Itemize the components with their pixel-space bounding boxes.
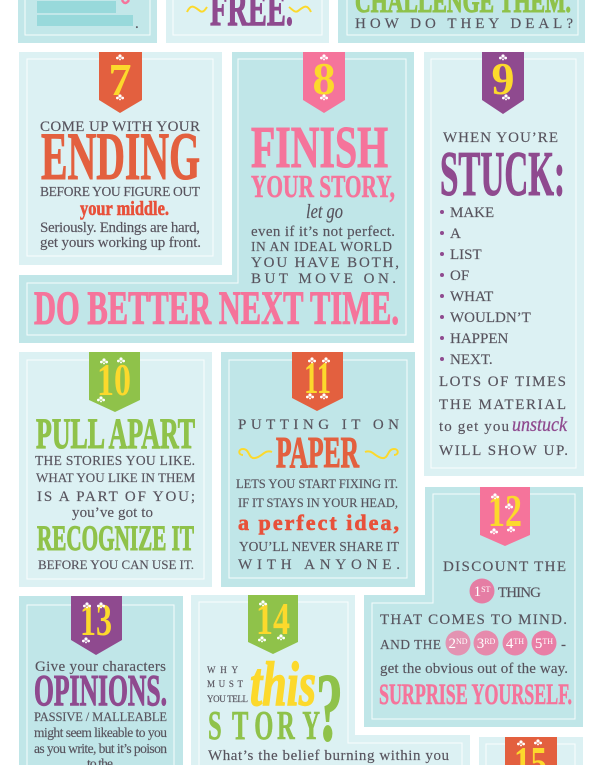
panel: rule 12: 4 bbox=[506, 636, 513, 652]
panel: rule 14: What’s the belief burning within you bbox=[208, 748, 450, 764]
panel: rule 11: 11 bbox=[304, 352, 331, 403]
panel: rule 9: 9 bbox=[492, 53, 514, 104]
panel: rule 9: MAKE bbox=[450, 205, 494, 221]
panel: rule 12: 5 bbox=[535, 636, 542, 652]
panel: rule 14 bbox=[191, 593, 470, 765]
panel: rule 14: STORY bbox=[208, 704, 320, 749]
panel: rule 7: your middle. bbox=[80, 198, 169, 220]
panel: rule 11: a perfect idea, bbox=[238, 510, 399, 535]
panel: top left cropped card: . bbox=[135, 16, 139, 32]
panel: rule 13: as you write, but it’s poison bbox=[34, 741, 167, 756]
panel: rule 11: IF IT STAYS IN YOUR HEAD, bbox=[238, 496, 398, 510]
panel: rule 11: PAPER bbox=[276, 428, 360, 477]
panel: rule 11: YOU’LL NEVER SHARE IT bbox=[239, 539, 400, 554]
panel: rule 9: to get you bbox=[439, 419, 510, 435]
panel: rule 13: Give your characters bbox=[35, 659, 166, 675]
panel: rule 8: even if it’s not perfect. bbox=[251, 224, 395, 240]
panel: rule 14: WHY bbox=[207, 665, 238, 675]
panel: rule 9: WHEN YOU’RE bbox=[443, 130, 558, 146]
panel: rule 12: 2 bbox=[448, 636, 456, 652]
panel: rule 8: YOUR STORY, bbox=[251, 168, 395, 204]
panel: rule 8: DO BETTER NEXT TIME. bbox=[34, 282, 399, 335]
panel: rule 9: LIST bbox=[450, 247, 482, 263]
panel: rule 13: might seem likeable to you bbox=[34, 725, 167, 740]
panel: rule 8 bbox=[19, 52, 414, 343]
panel: rule 12: THAT COMES TO MIND. bbox=[380, 612, 567, 628]
panel: rule 14: this bbox=[250, 651, 316, 719]
panel: rule 12: - bbox=[561, 637, 566, 653]
panel: rule 15 bbox=[479, 737, 583, 765]
panel: rule 14: ? bbox=[316, 654, 343, 762]
panel: rule 13: OPINIONS. bbox=[34, 666, 167, 715]
panel: rule 8: YOU HAVE BOTH, bbox=[251, 255, 399, 271]
panel: rule 11 bbox=[221, 352, 415, 587]
panel: rule 12: RD bbox=[484, 637, 496, 646]
panel: rule 9: unstuck bbox=[512, 414, 568, 436]
panel: rule 11: WITH ANYONE. bbox=[238, 557, 400, 573]
panel: rule 7: BEFORE YOU FIGURE OUT bbox=[40, 184, 201, 199]
panel: rule 12: 12 bbox=[488, 485, 522, 536]
panel: rule 12: TH bbox=[542, 637, 553, 646]
panel: rule 8: BUT MOVE ON. bbox=[251, 271, 396, 287]
panel: rule 7: get yours working up front. bbox=[40, 235, 201, 251]
panel: rule 9: A bbox=[450, 226, 461, 242]
panel: rule 10: THE STORIES YOU LIKE. bbox=[35, 453, 195, 468]
panel: rule 11: LETS YOU START FIXING IT. bbox=[236, 477, 398, 491]
panel: rule 10: 10 bbox=[97, 354, 131, 405]
panel: rule 7: ENDING bbox=[41, 118, 200, 194]
panel: rule 8: IN AN IDEAL WORLD bbox=[251, 239, 392, 254]
panel: rule 7 bbox=[19, 52, 222, 265]
panel: rule 9: NEXT. bbox=[450, 352, 493, 368]
panel: rule 13 bbox=[19, 594, 183, 765]
panel: rule 12: 1 bbox=[474, 584, 481, 600]
panel: rule 10: you’ve got to bbox=[72, 505, 153, 521]
panel: rule 10: IS A PART OF YOU; bbox=[37, 489, 195, 505]
panel: rule 8: FINISH bbox=[251, 114, 388, 180]
panel: rule 9: LOTS OF TIMES bbox=[439, 374, 566, 390]
panel: rule 8: let go bbox=[306, 201, 343, 223]
panel: rule 10: WHAT YOU LIKE IN THEM bbox=[36, 470, 195, 485]
panel: rule 12: THING bbox=[498, 585, 541, 601]
panel: rule 10: BEFORE YOU CAN USE IT. bbox=[38, 557, 194, 572]
panel: rule 13: 13 bbox=[80, 594, 112, 645]
panel: rule 9: THE MATERIAL bbox=[439, 397, 566, 413]
panel: rule 12: ST bbox=[481, 585, 491, 594]
panel: top right challenge card: HOW DO THEY DEAL? bbox=[355, 16, 573, 32]
panel: rule 9: WHAT bbox=[450, 289, 493, 305]
panel: rule 9: WOULDN’T bbox=[450, 310, 531, 326]
panel: rule 10: RECOGNIZE IT bbox=[37, 518, 194, 558]
panel: rule 7: COME UP WITH YOUR bbox=[40, 119, 200, 135]
panel: rule 14: 14 bbox=[256, 593, 290, 644]
panel: rule 12: get the obvious out of the way. bbox=[380, 661, 568, 677]
panel: rule 7: 7 bbox=[108, 54, 132, 105]
panel: rule 9: OF bbox=[450, 268, 469, 284]
panel: rule 9 bbox=[424, 52, 584, 476]
panel: rule 12 bbox=[364, 485, 583, 727]
panel: rule 11: PUTTING IT ON bbox=[238, 417, 399, 433]
panel: rule 9: WILL SHOW UP. bbox=[439, 443, 568, 459]
panel: rule 14: YOU TELL bbox=[207, 694, 248, 704]
panel: rule 10: PULL APART bbox=[36, 411, 195, 458]
panel: top left cropped card bbox=[18, 0, 157, 43]
panel: rule 12: 3 bbox=[477, 636, 484, 652]
panel: rule 12: ND bbox=[456, 637, 468, 646]
panel: top centre FREE card bbox=[166, 0, 329, 43]
panel: rule 12: DISCOUNT THE bbox=[443, 559, 566, 575]
panel: rule 8: 8 bbox=[312, 53, 336, 104]
panel: top right challenge card bbox=[338, 0, 585, 43]
panel: rule 7: Seriously. Endings are hard, bbox=[40, 220, 200, 236]
panel: rule 12: AND THE bbox=[380, 637, 441, 652]
panel: rule 12: TH bbox=[513, 637, 524, 646]
panel: rule 9: HAPPEN bbox=[450, 331, 509, 347]
panel: rule 10 bbox=[19, 352, 212, 587]
panel: rule 14: MUST bbox=[207, 679, 244, 689]
panel: rule 13: PASSIVE / MALLEABLE bbox=[34, 710, 167, 724]
